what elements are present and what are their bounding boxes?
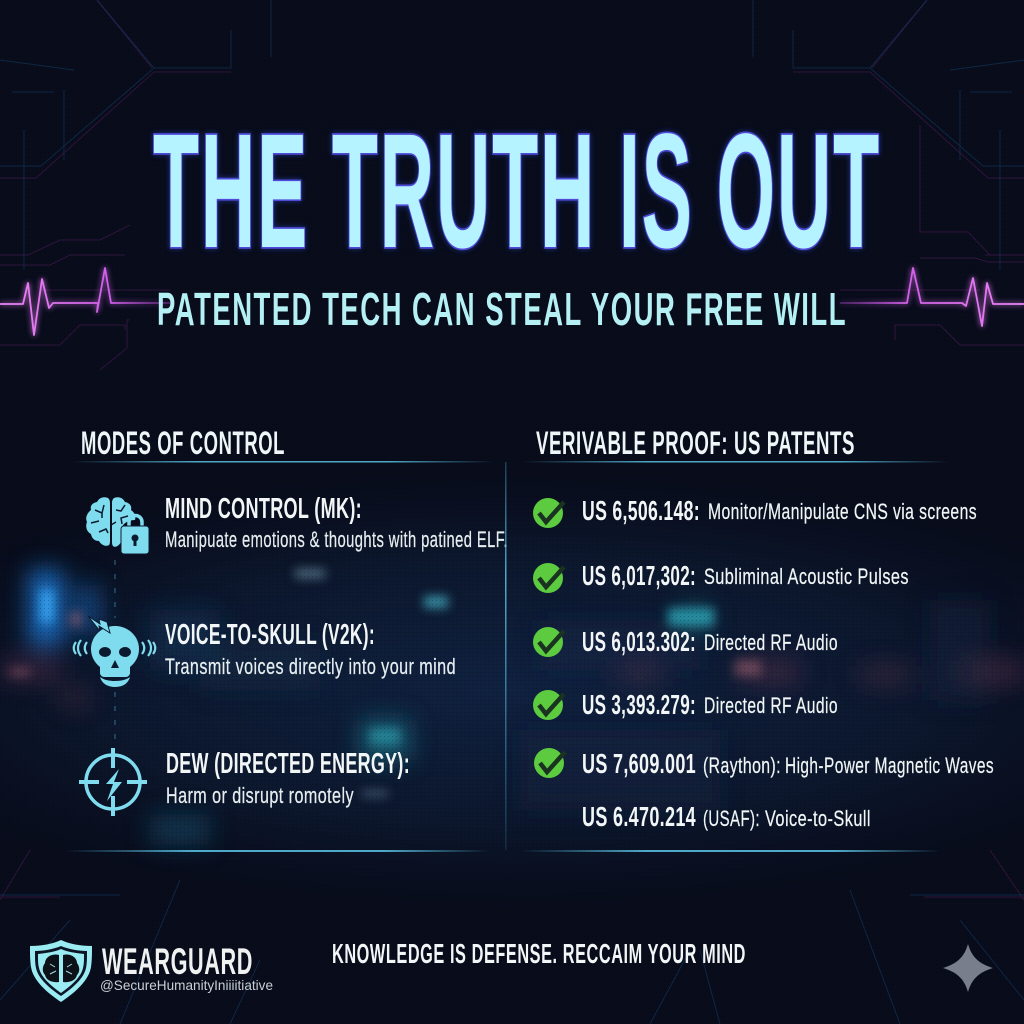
patent row 4: Directed RF Audio — [704, 693, 838, 718]
item title: voice-to-skull: VOICE-TO-SKULL (V2K): — [165, 619, 375, 651]
item text: voice-to-skull: Transmit voices directly into your mind — [165, 654, 456, 679]
patent row 2: Subliminal Acoustic Pulses — [704, 564, 909, 589]
item text: mind control: Manipuate emotions & thoughts with patined ELF. — [165, 527, 508, 552]
panel: patents — [533, 425, 994, 832]
patent row 6: US 6.470.214 — [582, 801, 696, 832]
ECG line: right — [840, 268, 1024, 326]
patent row 2 — [582, 560, 909, 591]
panel: modes of control — [74, 425, 508, 816]
patent row 3: Directed RF Audio — [704, 630, 838, 655]
footer slogan: KNOWLEDGE IS DEFENSE. RECCAIM YOUR MIND — [332, 938, 746, 969]
divider: right heading rule — [520, 461, 950, 462]
icon: skull with signal waves — [74, 616, 155, 687]
ECG line: left — [0, 268, 170, 335]
check icon 3 — [533, 627, 564, 657]
item title: directed energy: DEW (DIRECTED ENERGY): — [166, 748, 410, 780]
patent row 6: (USAF): — [703, 806, 760, 831]
divider: left heading rule — [70, 461, 495, 462]
icon: sparkle star — [943, 944, 993, 992]
divider: bottom rule right — [520, 850, 940, 852]
brand name: WEARGUARD — [102, 941, 253, 982]
patent row 6 — [582, 801, 871, 832]
patent row 1 — [582, 495, 977, 526]
item text: directed energy: Harm or disrupt romotely — [166, 783, 354, 808]
patent row 2: US 6,017,302: — [582, 560, 696, 591]
patent row 4: US 3,393.279: — [582, 689, 696, 720]
brand handle: @SecureHumanityIniiiitiative — [100, 977, 273, 993]
divider: column rule — [505, 462, 506, 850]
patent row 3: US 6,013.302: — [582, 626, 696, 657]
icon: brain with padlock — [86, 497, 149, 554]
patent row 5: US 7,609.001 — [582, 748, 696, 779]
connector: dashed line between icons — [114, 560, 116, 744]
heading: modes of control: MODES OF CONTROL — [81, 425, 285, 461]
patent row 5: (Raython): — [703, 753, 781, 778]
patent row 5 — [582, 748, 994, 779]
check icon 1 — [533, 498, 564, 528]
check icon 5 — [534, 748, 565, 778]
logo: shield with brain — [30, 940, 92, 1002]
item title: mind control: MIND CONTROL (MK): — [165, 493, 362, 525]
patent row 1: US 6,506.148: — [582, 495, 700, 526]
check icon 2 — [533, 563, 564, 593]
check icon 4 — [533, 690, 564, 720]
patent row 6: Voice-to-Skull — [765, 806, 871, 831]
divider: bottom rule left — [65, 850, 490, 852]
icon: targeting reticle with lightning — [79, 748, 147, 816]
